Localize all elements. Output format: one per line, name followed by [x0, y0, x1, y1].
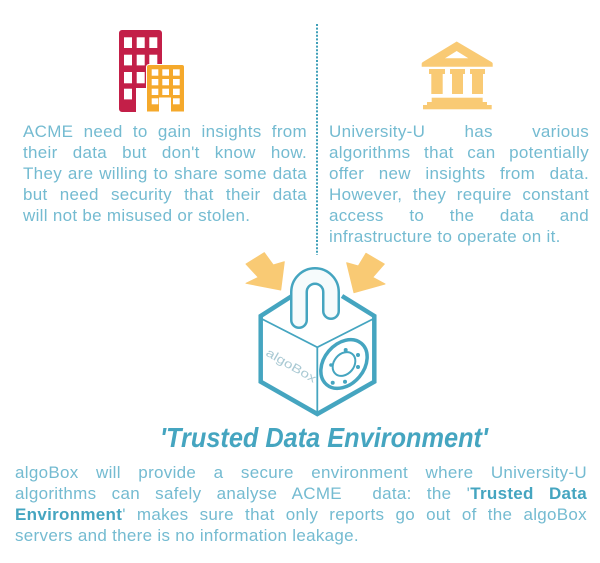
- text block: algoBox description: algorithms can safely analyse ACME data: the 'Trusted Data: [15, 484, 587, 503]
- text block: ACME: will not be misused or stolen.: [23, 206, 250, 225]
- icon: algoBox padlock cube: [261, 276, 377, 414]
- text block: University-U: access to the data and: [329, 206, 589, 225]
- text block: algoBox description: [15, 463, 587, 545]
- text block: University-U: offer new insights from data.: [329, 164, 589, 183]
- text block: University-U: However, they require constant: [329, 185, 589, 204]
- text block: University-U: [329, 122, 589, 246]
- text block: ACME: ACME need to gain insights from: [23, 122, 307, 141]
- text block: University-U: algorithms that can potentially: [329, 143, 589, 162]
- icon: office buildings: [119, 30, 184, 112]
- label on box: algoBox: [264, 345, 319, 386]
- icon: university temple: [422, 42, 493, 109]
- heading: Trusted Data Environment: 'Trusted Data Environment': [160, 422, 489, 453]
- text block: ACME: They are willing to share some data: [23, 164, 307, 183]
- text block: ACME: their data but don't know how.: [23, 143, 307, 162]
- text block: ACME: [23, 122, 307, 225]
- text block: University-U: University-U has various: [329, 122, 589, 141]
- text block: algoBox description: servers and there is no information leakage.: [15, 526, 359, 545]
- divider: dotted vertical line: [316, 24, 318, 255]
- arrow: left pointing to box: [246, 253, 284, 290]
- shackle: [299, 276, 331, 320]
- text block: University-U: infrastructure to operate on it.: [329, 227, 561, 246]
- vault wheel: [311, 330, 377, 398]
- arrow: right pointing to box: [347, 253, 385, 293]
- text block: ACME: but need security that their data: [23, 185, 307, 204]
- text block: algoBox description: Environment' makes sure that only reports go out of the algoBox: [15, 505, 587, 524]
- text block: algoBox description: algoBox will provide a secure environment where University-U: [15, 463, 587, 482]
